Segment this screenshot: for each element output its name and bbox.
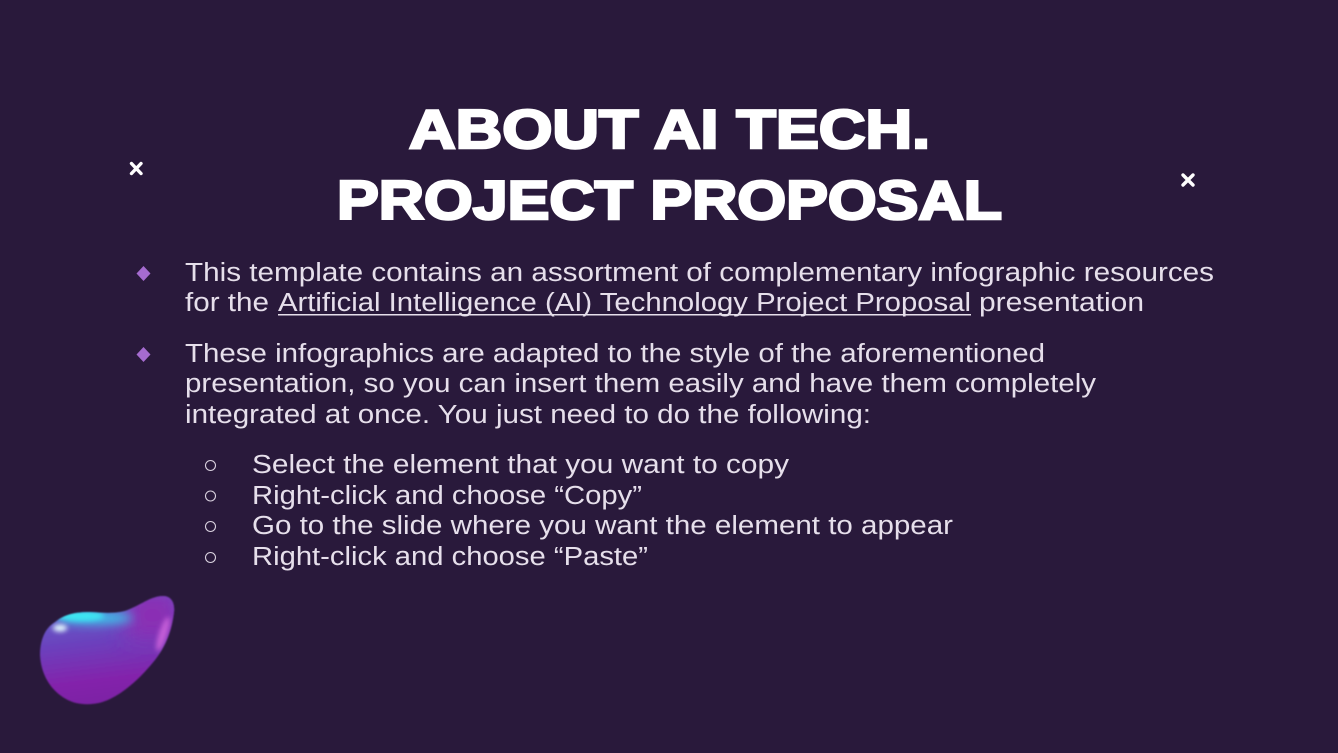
title: ABOUT AI TECH.	[409, 98, 930, 160]
bullet text 1: Artificial Intelligence (AI) Technology Project Proposal	[278, 289, 971, 317]
bullet text 2: presentation, so you can insert them easily and have them completely	[185, 370, 1096, 398]
step 1: Select the element that you want to copy	[252, 451, 789, 479]
title	[337, 98, 1002, 231]
icon: diamond bullet 1	[136, 266, 150, 281]
bullet text 1: for the	[185, 289, 269, 317]
title: PROJECT PROPOSAL	[337, 169, 1002, 231]
icon: right cross decoration	[1183, 175, 1193, 185]
icon: diamond bullet 2	[136, 347, 150, 362]
step 2: Right-click and choose “Copy”	[252, 482, 642, 510]
bullet text 2: These infographics are adapted to the style of the aforementioned	[185, 340, 1045, 368]
bullet text 2: integrated at once. You just need to do the following:	[185, 401, 871, 429]
sub-list of steps	[206, 451, 954, 571]
gradient blob	[39, 595, 176, 706]
bullet text 1: presentation	[979, 289, 1144, 317]
first bullet block	[136, 259, 1214, 317]
bullet text 1: This template contains an assortment of complementary infographic resources	[185, 259, 1214, 287]
bullet text 1	[185, 259, 1214, 317]
step 4: Right-click and choose “Paste”	[252, 543, 648, 571]
bullet text 2	[185, 340, 1096, 429]
second bullet block	[136, 340, 1096, 429]
icon: left cross decoration	[132, 164, 141, 174]
step 3: Go to the slide where you want the element to appear	[252, 512, 954, 540]
